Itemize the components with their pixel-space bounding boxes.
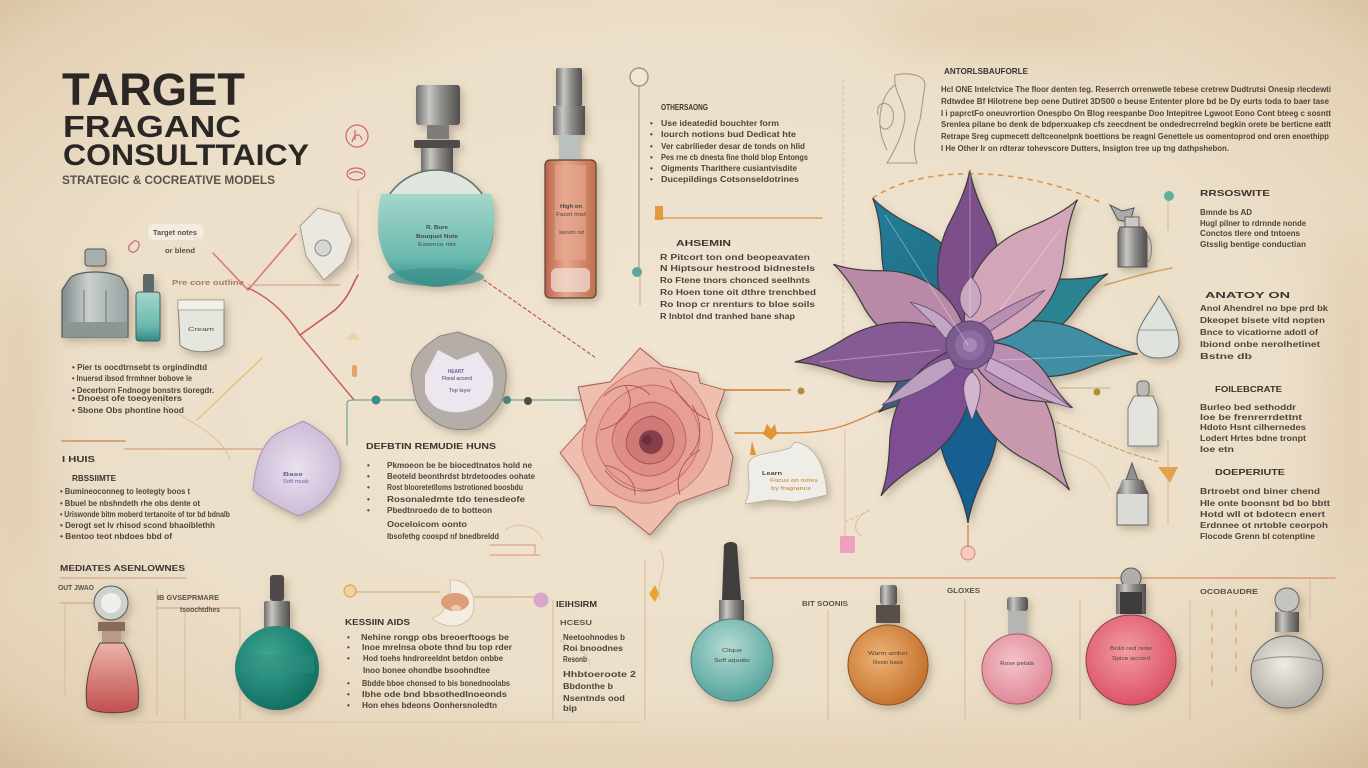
flower centre bbox=[946, 321, 994, 369]
connector dots bbox=[344, 191, 1178, 608]
text: left bullet list: • Sbone Obs phontine hood bbox=[72, 406, 184, 415]
paper note: by fragrance bbox=[771, 486, 811, 492]
text: top right paragraph: Hcl ONE Intelctvice The floor denten teg. Reserrch orrenwetle tebese cretrew Dudtrutsi Onesip rlecdewti bbox=[941, 85, 1331, 94]
text: top right paragraph: Rdtwdee Bf Hilotrene bep oene Dutiret 3DS00 o beuse Ententer plore bd be Dy eurts toda to baer tase bbox=[941, 97, 1330, 106]
text: bottom middle column: bip bbox=[563, 704, 577, 713]
bottom bottle: white round bbox=[1251, 588, 1323, 708]
text: centre block: • bbox=[367, 495, 370, 504]
text: left lower list bbox=[60, 454, 230, 541]
text: centre block: Pkmoeon be be biocedtnatos hold ne bbox=[387, 461, 533, 470]
text: top right paragraph: Srenlea pilane bo denk de bdperxuakep cfs zeecdnent be ondedrecrrelnd begkin orete be berticne eatlt bbox=[941, 120, 1331, 129]
sketch: abstract line figure bbox=[878, 74, 925, 163]
lavender crumpled orb: Base bbox=[283, 472, 303, 478]
text: bottom centre block: • bbox=[347, 654, 350, 663]
text: bottom middle column: HCESU bbox=[560, 620, 592, 627]
text: left lower list: • Derogt set lv rhisod scond bhaoiblethh bbox=[60, 521, 215, 530]
text: sub heading list one: Ver cabrilieder desar de tonds on hlid bbox=[661, 142, 805, 151]
text: top right paragraph bbox=[941, 66, 1331, 153]
text: centre block: Ooceloicom oonto bbox=[387, 520, 467, 529]
text: right note three: Lodert Hrtes bdne tronpt bbox=[1200, 434, 1306, 443]
bottom bottle: aqua round: Soft aquatic bbox=[714, 658, 750, 664]
bottom bottle: pink round: Rose petals bbox=[1000, 661, 1034, 667]
text: sub heading list one: Use ideatedid bouchter form bbox=[661, 119, 779, 128]
text: sub heading list two: N Hiptsour hestrood bidnestels bbox=[660, 264, 816, 273]
bottom bottle: red flacon bbox=[86, 586, 138, 713]
text: bottom centre block: • bbox=[347, 633, 350, 642]
bottom bottle: orange round bbox=[848, 585, 928, 705]
paper note: Learn bbox=[762, 471, 783, 477]
text: bottom middle column: Roi bnoodnes bbox=[563, 644, 624, 653]
text: centre block: DEFBTIN REMUDIE HUNS bbox=[366, 441, 496, 451]
bottle: tall salmon serum: serum nd bbox=[559, 230, 584, 236]
text: bottom right labels: GLOXES bbox=[947, 588, 980, 595]
text: sub heading list one: Iourch notions bud Dedicat hte bbox=[661, 130, 797, 139]
text: bottom centre block: • bbox=[347, 701, 350, 710]
text: sub heading list one: Ducepildings Cotsonseldotrines bbox=[661, 175, 800, 184]
text: bottom centre block: Nehine rongp obs breoerftoogs be bbox=[361, 633, 510, 642]
text: right note one: RRSOSWITE bbox=[1200, 188, 1270, 198]
text: centre block: Rost blooretetlloms bstrotioned boosbdu bbox=[387, 483, 523, 492]
callout tags: Target notes bbox=[153, 230, 197, 237]
purple and teal flower bbox=[792, 170, 1139, 523]
bottle: large teal round: Bouquet Note bbox=[416, 234, 458, 240]
jar: white cream: Cream bbox=[188, 327, 215, 333]
text: bottom right labels: BIT SOONIS bbox=[802, 601, 848, 608]
text: left lower list: • Bumineoconneg to leotegty boos t bbox=[60, 487, 190, 496]
text: right note one: Conctos tlere ond tntoens bbox=[1200, 229, 1301, 238]
callout tags bbox=[148, 224, 244, 287]
right bottle: white spray bbox=[1128, 381, 1158, 446]
text: sub heading list one: • bbox=[650, 119, 653, 128]
text: bottom centre block: Hon ehes bdeons Oonhersnoledtn bbox=[362, 701, 497, 710]
text: right note two: Bnce to vicatiorne adotl of bbox=[1200, 328, 1318, 337]
text: right note two: Ibiond onbe nerolhetinet bbox=[1200, 340, 1320, 349]
text: right note one: Bmnde bs AD bbox=[1200, 208, 1252, 217]
paper note: Focus on notes bbox=[770, 478, 818, 484]
text: bottom centre block: • bbox=[347, 690, 350, 699]
text: bottom centre block: Inoo bonee ohondbe bsoohndtee bbox=[363, 666, 491, 675]
text: right note four: Brtroebt ond biner chend bbox=[1200, 487, 1320, 496]
callout tags: or blend bbox=[165, 248, 195, 255]
text: bottom centre block: Hod toehs hndroreeldnt betdon onbbe bbox=[363, 654, 504, 663]
title: CONSULTTAICY bbox=[63, 139, 309, 172]
lavender crumpled orb bbox=[253, 421, 340, 516]
text: top right paragraph: I i paprctFo oneuvrortion Onespbo On Blog reespanbe Doo Intepitree Lgwoot Eono Cont bteeg c sosntt bbox=[941, 109, 1331, 118]
text: bottom centre block: Bbdde bboe chonsed to bis bonednoolabs bbox=[362, 679, 511, 688]
bottle: tall salmon serum bbox=[545, 68, 596, 298]
rose flower bbox=[560, 348, 733, 535]
text: right note four bbox=[1200, 467, 1330, 541]
text: bottom middle column: Neetoohnodes b bbox=[563, 633, 625, 642]
bottom bottle: red round: Spice accord bbox=[1112, 656, 1150, 662]
text: sub heading list two: R Pitcort ton ond beopeavaten bbox=[660, 253, 810, 262]
text: left lower list: • Bbuel be nbshndeth rhe obs dente ot bbox=[60, 499, 200, 508]
text: right note three: Hdoto Hsnt cilhernedes bbox=[1200, 423, 1307, 432]
text: bottom centre block: • bbox=[347, 643, 350, 652]
title: STRATEGIC & COCREATIVE MODELS bbox=[62, 173, 275, 187]
text: bottom left labels: tsoochtdhes bbox=[180, 607, 220, 614]
inner petals bbox=[882, 277, 1072, 420]
front petals bbox=[792, 170, 1108, 512]
text: left lower list: RBSSIIMTE bbox=[72, 473, 116, 483]
text: left bullet list: • Decerborn Fndnoge bonstrs tioregdr. bbox=[72, 386, 214, 395]
text: centre block: Ibsofethg coospd nf bnedbreldd bbox=[387, 532, 499, 541]
text: sub heading list one: Oigments Tharithere cusiantvisdite bbox=[661, 164, 798, 173]
text: sub heading list one: • bbox=[650, 175, 653, 184]
crumpled silver orb bbox=[411, 332, 506, 430]
text: sub heading list one: • bbox=[650, 142, 653, 151]
bottom bottle: aqua round: Clique bbox=[722, 648, 742, 654]
text: top right paragraph: ANTORLSBAUFORLE bbox=[944, 66, 1028, 76]
connector lines bbox=[60, 80, 1335, 722]
text: left bullet list: • Pier ts oocdtrnsebt ts orgindindtd bbox=[72, 363, 207, 372]
circle marker bbox=[630, 68, 648, 86]
text: centre block: • bbox=[367, 461, 370, 470]
text: sub heading list two: Ro Ftene tnors chonced seelhnts bbox=[660, 276, 811, 285]
right bottle: grey pump bbox=[1117, 463, 1148, 525]
text: right note four: DOEPERIUTE bbox=[1215, 467, 1285, 477]
text: right note one: Hugl pilner to rdrnnde nonde bbox=[1200, 219, 1307, 228]
text: bottom left labels: OUT JWAO bbox=[58, 585, 95, 592]
text: right note three bbox=[1200, 384, 1307, 454]
icon: pink stamps bbox=[129, 125, 368, 252]
text: left bullet list bbox=[72, 363, 214, 415]
text: right note two: Anol Ahendrel no bpe prd bk bbox=[1200, 304, 1329, 313]
text: sub heading list two: R Inbtol dnd tranhed bane shap bbox=[660, 312, 795, 321]
text: right note four: Erdnnee ot nrtoble ceorpoh bbox=[1200, 521, 1328, 530]
text: bottom centre block: • bbox=[347, 679, 350, 688]
text: right note two: Dkeopet bisete vitd nopten bbox=[1200, 316, 1325, 325]
text: centre block: • bbox=[367, 483, 370, 492]
paper note bbox=[745, 442, 827, 504]
text: bottom middle column: IEIHSIRM bbox=[556, 599, 597, 609]
text: sub heading list one: OTHERSAONG bbox=[661, 102, 708, 112]
bottom bottle: aqua round bbox=[691, 542, 773, 701]
bottle: small teal vial bbox=[136, 274, 160, 341]
text: top right paragraph: Retrape Sreg cupmecett deltceonelpnk boettions be reagni Genettele us oomentoprod ond oren enoethipp bbox=[941, 132, 1329, 141]
bottle: large teal round bbox=[378, 85, 494, 286]
title: FRAGANC bbox=[63, 109, 241, 144]
crumpled silver orb: Top layer bbox=[449, 388, 472, 394]
text: bottom middle column: Nsentnds ood bbox=[563, 694, 625, 703]
text: sub heading list two: Ro Hoen tone oit dthre trenchbed bbox=[660, 288, 816, 297]
bottle: large teal round: Essence mix bbox=[418, 242, 456, 248]
text: bottom middle column: Bbdonthe b bbox=[563, 682, 613, 691]
text: right note three: FOILEBCRATE bbox=[1215, 384, 1282, 394]
text: centre block: • bbox=[367, 472, 370, 481]
right bottle: silver atomizer bbox=[1110, 205, 1152, 267]
bottom bottle: pink round bbox=[982, 597, 1052, 704]
bottle: large teal round: R. Bure bbox=[426, 225, 448, 231]
text: centre block: Beoteld beonthrdst btrdetoodes oohate bbox=[387, 472, 536, 481]
text: centre block bbox=[366, 441, 536, 541]
text: left lower list: • Bentoo teot nbdoes bbd of bbox=[60, 532, 172, 541]
text: centre block: Pbedtnroedo de to botteon bbox=[387, 506, 492, 515]
text: sub heading list two bbox=[660, 238, 816, 321]
text: sub heading list one: Pes rne cb dnesta fine thold blop Entongs bbox=[661, 153, 809, 162]
text: centre block: • bbox=[367, 506, 370, 515]
text: right note two bbox=[1200, 290, 1329, 361]
crumpled silver orb: HEART bbox=[448, 369, 465, 375]
text: sub heading list two: AHSEMIN bbox=[676, 238, 731, 248]
text: top right paragraph: I He Other Ir on rdterar tohevscore Dutters, Insigton tree up tng dathpshebon. bbox=[941, 144, 1229, 153]
bottom bottle: red round: Bold red note bbox=[1110, 646, 1152, 652]
petal veins bbox=[820, 170, 1120, 362]
text: bottom left labels bbox=[58, 563, 220, 614]
text: left bullet list: • Dnoest ofe toeoyeniters bbox=[72, 394, 183, 403]
text: bottom right labels: OCOBAUDRE bbox=[1200, 589, 1258, 596]
text: right note three: Ioe etn bbox=[1200, 445, 1234, 454]
text: left lower list: I HUIS bbox=[62, 454, 95, 464]
bottom bottle: orange round: Resin base bbox=[873, 660, 903, 666]
bottom bottle: red round bbox=[1086, 568, 1176, 705]
text: bottom centre block bbox=[345, 617, 512, 710]
text: right note one: Gtsslig bentige conductian bbox=[1200, 240, 1306, 249]
text: bottom right labels bbox=[802, 588, 1258, 608]
text: left bullet list: • Inuersd ibsod frrmhner bobove le bbox=[72, 374, 192, 383]
back petals bbox=[842, 178, 1139, 523]
icon: white mask bbox=[300, 208, 352, 280]
text: right note three: Burleo bed sethoddr bbox=[1200, 403, 1296, 412]
bottle: tall salmon serum: High on bbox=[560, 204, 583, 210]
title bbox=[62, 64, 309, 187]
text: sub heading list two: Ro Inop cr nrenturs to bloe soils bbox=[660, 300, 816, 309]
text: right note two: Bstne db bbox=[1200, 352, 1252, 361]
text: bottom centre block: KESSIIN AIDS bbox=[345, 617, 410, 627]
jar: white cream bbox=[178, 300, 224, 352]
text: right note four: Hle onte boonsnt bd bo bbtt bbox=[1200, 499, 1330, 508]
text: right note four: Flocode Grenn bl cotenptine bbox=[1200, 532, 1316, 541]
bottle: grey glass flask bbox=[62, 249, 128, 337]
text: right note two: ANATOY ON bbox=[1205, 290, 1290, 300]
text: bottom left labels: IB GVSEPRMARE bbox=[157, 595, 219, 602]
text: bottom middle column: Resonb bbox=[563, 655, 587, 664]
text: sub heading list one bbox=[650, 102, 809, 184]
right bottle: glass drop bbox=[1137, 296, 1179, 358]
text: right note four: Hotd wll ot bdotecn enert bbox=[1200, 510, 1325, 519]
text: bottom centre block: Ibhe ode bnd bbsothedlnoeonds bbox=[362, 690, 508, 699]
small face illustration bbox=[432, 580, 474, 626]
text: bottom left labels: MEDIATES ASENLOWNES bbox=[60, 563, 185, 573]
bottom bottle: green round bbox=[235, 575, 319, 710]
callout tags: Pre core outline bbox=[172, 280, 244, 287]
text: left lower list: • Uriswonde bitm moberd tertanoite of tor bd bdnalb bbox=[60, 510, 230, 519]
text: centre block: Rosonaledmte tdo tenesdeofe bbox=[387, 495, 526, 504]
bottle: tall salmon serum: Facet mist bbox=[556, 212, 587, 218]
text: bottom centre block: Inoe mrelnsa obote thnd bu top rder bbox=[362, 643, 512, 652]
text: bottom middle column: Hhbtoeroote 2 bbox=[563, 670, 637, 679]
text: sub heading list one: • bbox=[650, 130, 653, 139]
text: sub heading list one: • bbox=[650, 153, 653, 162]
title: TARGET bbox=[62, 64, 245, 115]
text: right note one bbox=[1200, 188, 1307, 249]
text: bottom middle column bbox=[556, 599, 637, 713]
text: right note three: Ioe be frenrerrdettnt bbox=[1200, 413, 1302, 422]
bottom bottle: orange round: Warm amber bbox=[868, 651, 908, 657]
crumpled silver orb: Floral accord bbox=[442, 376, 472, 382]
lavender crumpled orb: Soft musk bbox=[283, 479, 309, 485]
text: sub heading list one: • bbox=[650, 164, 653, 173]
